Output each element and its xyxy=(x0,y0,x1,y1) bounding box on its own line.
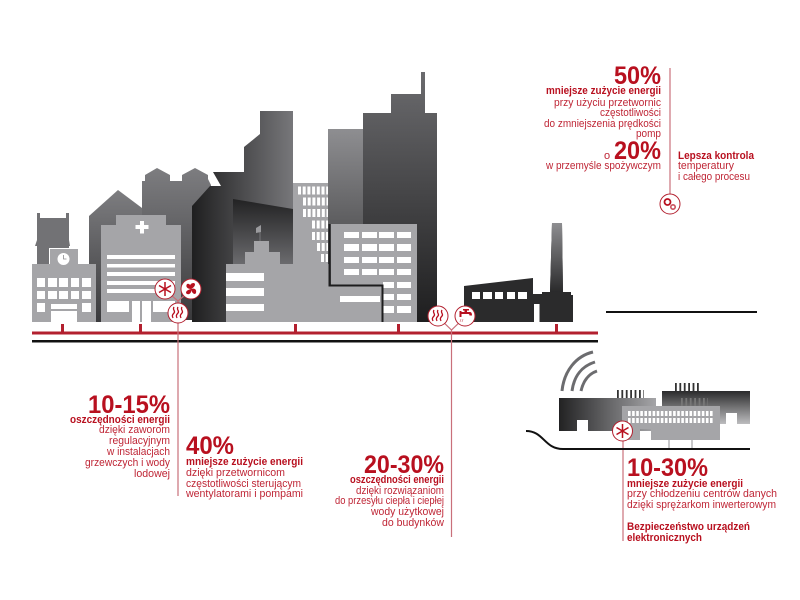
text block: 50% pumps: w przemyśle spożywczym xyxy=(545,160,661,172)
data centre: supports xyxy=(669,440,692,449)
text block: 10-15%: dzięki zaworom xyxy=(99,424,170,436)
data centre: right dark block xyxy=(662,391,750,424)
data centre: cooling fins xyxy=(617,387,701,394)
text block: 50% pumps: pomp xyxy=(636,128,661,140)
black line right xyxy=(606,311,757,313)
building: recessed shaded facade xyxy=(233,199,293,265)
text block: 10-30%: mniejsze zużycie energii xyxy=(627,478,743,490)
text block: 50% pumps: mniejsze zużycie energii xyxy=(546,85,661,97)
building: dark roof behind school xyxy=(35,213,70,264)
text block: 10-30% xyxy=(627,454,777,544)
text block: 10-15%: w instalacjach xyxy=(106,446,170,458)
building: twin gabled back block xyxy=(142,168,211,320)
city skyline xyxy=(32,72,573,322)
building: stepped front block with flag xyxy=(226,225,330,322)
icon: snowflake data centre xyxy=(612,421,632,441)
text block: 20-30%: do budynków xyxy=(382,517,444,529)
text block: 50% pumps: o xyxy=(604,150,610,162)
text block: 50% pumps: przy użyciu przetwornic xyxy=(554,97,661,109)
text block: 10-30%: dzięki sprężarkom inwerterowym xyxy=(627,499,776,511)
leader line: data centre xyxy=(622,441,624,541)
text block: 50% pumps: do zmniejszenia prędkości xyxy=(544,118,661,130)
text block: 20-30%: dzięki rozwiązaniom xyxy=(356,485,444,497)
icon: fan xyxy=(181,279,201,299)
text block: better control xyxy=(678,150,755,183)
text block: better control: i całego procesu xyxy=(678,171,750,183)
text block: 10-15%: 10-15% xyxy=(88,391,170,419)
building: skyscraper with antenna xyxy=(363,72,437,322)
text block: 10-30%: Bezpieczeństwo urządzeń xyxy=(627,521,750,533)
leader line: top group xyxy=(669,68,671,194)
text block: better control: temperatury xyxy=(678,160,734,172)
text block: 50% pumps: częstotliwości xyxy=(600,107,661,119)
data centre: left dark block xyxy=(559,398,656,431)
text block: 20-30%: wody użytkowej xyxy=(370,506,444,518)
building: front office block xyxy=(326,224,417,322)
text block: 20-30%: do przesyłu ciepła i ciepłej xyxy=(335,495,444,507)
icon: water tap xyxy=(455,306,475,326)
text block: 10-30%: przy chłodzeniu centrów danych xyxy=(627,488,777,500)
building: tall dark tower with notch xyxy=(192,111,293,322)
text block: 10-15%: grzewczych i wody xyxy=(85,457,170,469)
data centre illustration xyxy=(526,352,750,449)
text block: better control: Lepsza kontrola xyxy=(678,150,755,162)
text block: 10-15%: oszczędności energii xyxy=(70,414,170,426)
text block: 10-15%: lodowej xyxy=(134,468,170,480)
icon: heat waves middle xyxy=(428,306,448,326)
cable curve xyxy=(526,431,750,449)
leader line: left group xyxy=(165,290,191,496)
wireless signal arcs xyxy=(562,352,597,391)
text block: 20-30% xyxy=(335,451,444,529)
black pipe xyxy=(32,340,598,342)
text block: 20-30%: 20-30% xyxy=(364,451,444,479)
text block: 40%: dzięki przetwornicom xyxy=(186,467,285,479)
data centre: windows xyxy=(628,414,714,420)
text block: 40%: mniejsze zużycie energii xyxy=(186,456,303,468)
data centre: centre fins xyxy=(681,398,708,406)
text block: 10-15%: regulacyjnym xyxy=(109,435,170,447)
text block: 10-15% xyxy=(70,391,170,480)
icon: heat waves left xyxy=(168,303,188,323)
text block: 40% xyxy=(185,432,303,500)
building: gabled back house xyxy=(89,190,146,322)
icon: gears xyxy=(660,194,680,214)
data centre: light front block xyxy=(622,406,720,440)
text block: 40%: częstotliwości sterującym xyxy=(186,478,301,490)
text block: 10-30%: elektronicznych xyxy=(627,532,702,544)
text block: 20-30%: oszczędności energii xyxy=(350,474,444,486)
text block: 10-30%: 10-30% xyxy=(627,454,708,482)
building: school with clock xyxy=(32,248,96,322)
text block: 50% pumps: 50% xyxy=(614,62,661,90)
text block: 40%: 40% xyxy=(186,432,234,460)
building: grey tower with window grid xyxy=(293,183,330,322)
factory with chimney xyxy=(464,223,573,322)
icon: snowflake xyxy=(155,279,175,299)
text block: 50% pumps: 20% xyxy=(614,137,661,165)
text block: 50% pumps xyxy=(544,62,661,172)
text block: 40%: wentylatorami i pompami xyxy=(185,488,303,500)
building: hospital xyxy=(101,215,181,322)
leader line: middle group xyxy=(438,317,465,537)
red heat pipe with branches xyxy=(32,324,598,334)
building: mid grey tower xyxy=(328,129,364,322)
